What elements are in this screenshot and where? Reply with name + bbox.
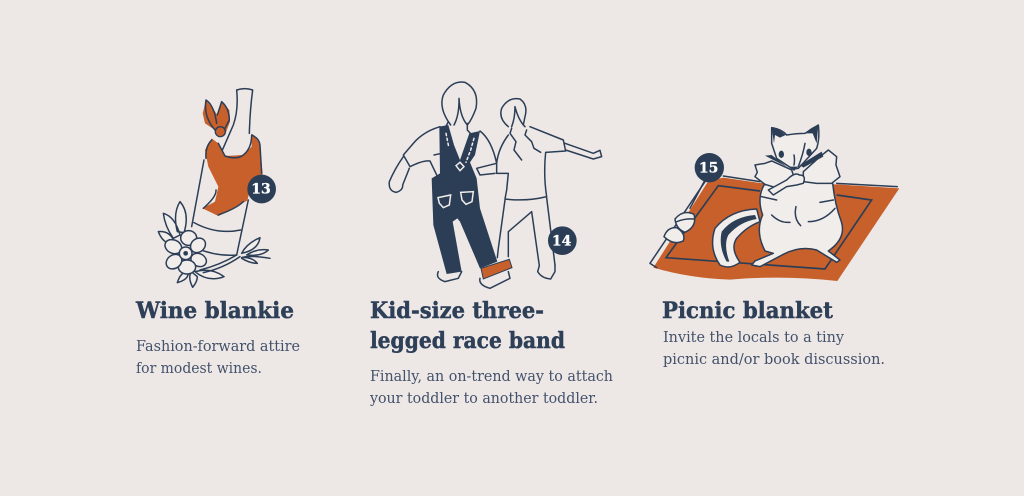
orange ankle band (481, 259, 512, 279)
icon: two children with three-legged race band (389, 82, 602, 288)
paws (768, 174, 804, 195)
acorns (664, 180, 705, 243)
text: race band description: Finally, an on-trend way to attach (370, 369, 613, 385)
navy overalls (432, 125, 497, 274)
text: wine blankie description: Fashion-forward attire (136, 339, 300, 355)
text: picnic blanket description: picnic and/or book discussion. (663, 352, 885, 368)
text: picnic blanket description: Invite the locals to a tiny (663, 330, 845, 346)
text: picnic blanket description (663, 330, 885, 368)
heading: three-legged race band: Kid-size three- (370, 298, 544, 324)
number badge 14: 14 (552, 233, 572, 249)
text: wine blankie description (136, 339, 300, 377)
number badge 15 (695, 153, 724, 182)
right child outline (497, 99, 602, 279)
chipmunk head (765, 125, 823, 171)
number badge 15: 15 (699, 160, 718, 176)
chipmunk body (752, 178, 843, 267)
heading: picnic blanket: Picnic blanket (662, 298, 834, 324)
heading: three-legged race band (370, 298, 565, 354)
overall details (438, 133, 474, 208)
number badge 14 (548, 226, 577, 255)
number badge 13 (247, 175, 276, 203)
orange rug (650, 176, 899, 281)
icon: chipmunk on picnic blanket (650, 125, 899, 281)
body details (762, 197, 835, 226)
chipmunk cheeks (755, 150, 840, 189)
number badge 13: 13 (251, 182, 271, 198)
text: race band description: your toddler to another toddler. (369, 391, 598, 407)
bottle outline (192, 89, 253, 255)
text: race band description (369, 369, 613, 407)
text: wine blankie description: for modest wines. (136, 361, 262, 377)
heading: three-legged race band: legged race band (370, 328, 565, 354)
orange blanket (203, 100, 263, 216)
icon: wine bottle with orange blanket (158, 89, 276, 287)
left child outline (389, 82, 510, 288)
flower and leaves (158, 202, 270, 287)
heading: wine blankie: Wine blankie (135, 298, 294, 324)
chipmunk tail (713, 209, 760, 267)
